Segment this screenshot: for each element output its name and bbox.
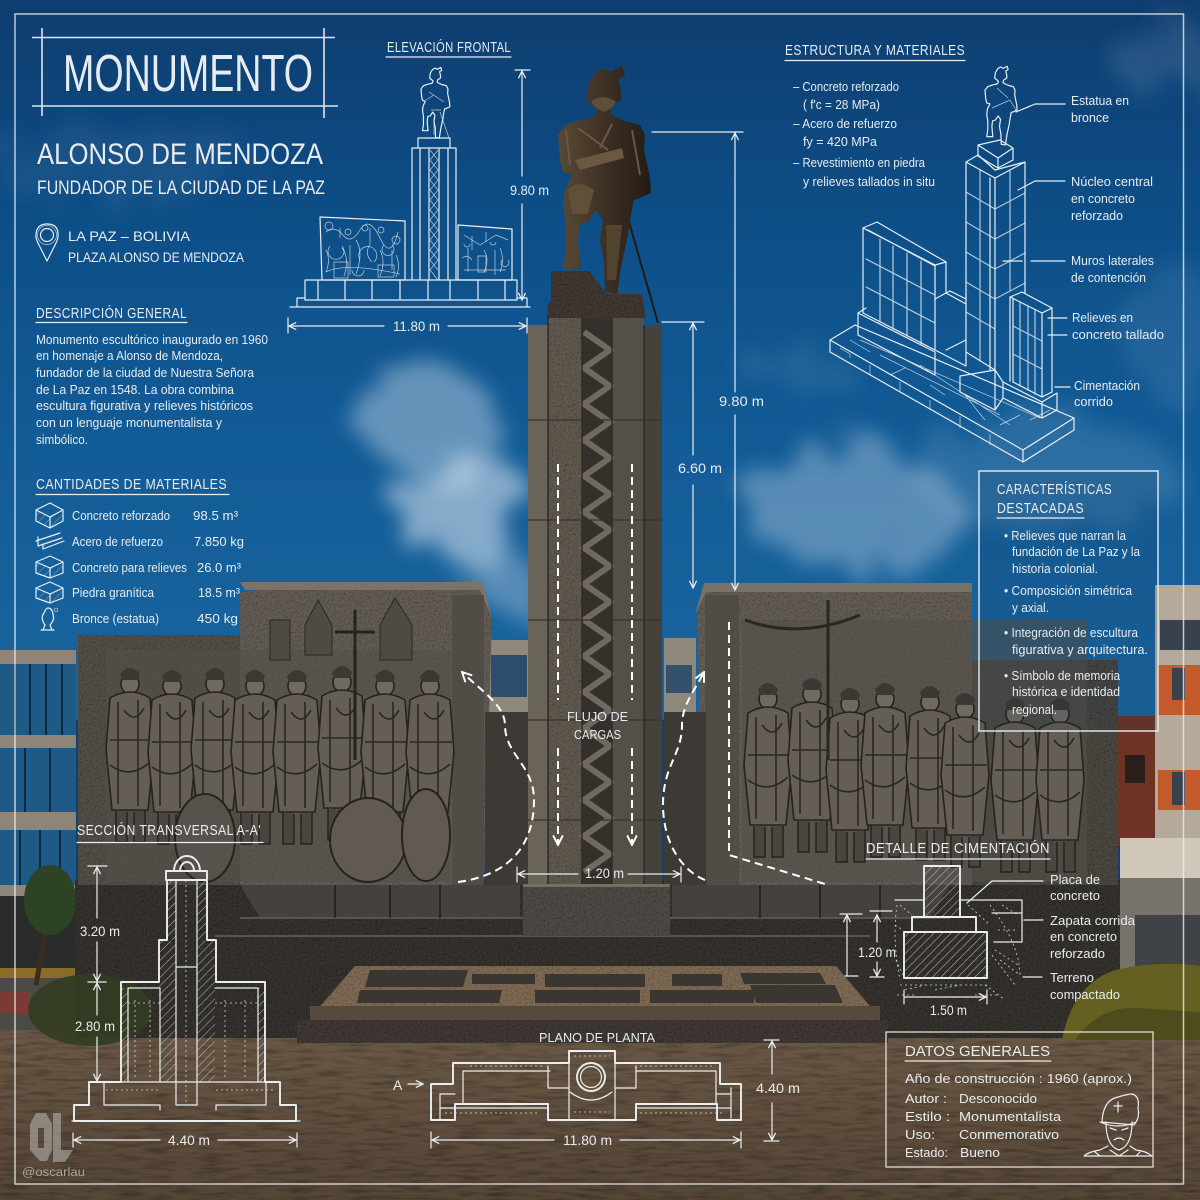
callout: cimentación: corrido	[1074, 395, 1113, 409]
text block: features: histórica e identidad	[1012, 685, 1120, 699]
text block: datos: Año de construcción : 1960 (aprox.)	[905, 1071, 1132, 1086]
panel: elevación frontal	[288, 39, 549, 334]
dimension: 3.20 m: 3.20 m	[80, 923, 120, 939]
materials table	[36, 503, 244, 630]
dimension: 11.80 m plan: 11.80 m	[563, 1132, 612, 1148]
callout: relieves	[1048, 311, 1164, 342]
text block: datos: Estilo :	[905, 1109, 950, 1124]
material row 4: 18.5 m³	[198, 586, 240, 600]
arrow: load flow right	[663, 672, 705, 880]
material row 5: 450 kg	[197, 612, 238, 626]
dimension: 4.40 m plan: 4.40 m	[756, 1080, 800, 1096]
text block: descripción: de La Paz en 1548. La obra combina	[36, 383, 234, 397]
background buildings right	[1118, 585, 1200, 1040]
callout: estatua en bronce: bronce	[1071, 111, 1109, 125]
materials list: – Revestimiento en piedra	[793, 156, 925, 170]
callout: muros laterales: de contención	[1071, 271, 1146, 285]
callout: estatua en bronce	[1016, 94, 1129, 125]
material row 2	[72, 535, 244, 549]
text block: features: regional.	[1012, 703, 1057, 717]
heading: plano de planta: PLANO DE PLANTA	[539, 1031, 656, 1045]
panel: detalle de cimentación	[840, 840, 1135, 1018]
text block: features: • Símbolo de memoria	[1004, 669, 1120, 683]
statue	[547, 66, 658, 323]
dimension: 2.80 m	[75, 983, 115, 1081]
material row 1	[72, 509, 238, 523]
materials list: – Acero de refuerzo	[793, 117, 897, 131]
material row 3: 26.0 m³	[197, 561, 241, 575]
panel: estructura y materiales	[785, 43, 1164, 462]
bushes	[28, 964, 1200, 1046]
text block: datos: Monumentalista	[959, 1109, 1062, 1124]
dimension: 11.80 m plan	[431, 1132, 741, 1148]
watermark: @oscarlau	[22, 1167, 85, 1179]
sky background	[0, 0, 1200, 720]
callout: núcleo central	[1018, 175, 1153, 223]
text block: descripción: fundador de la ciudad de Nuestra Señora	[36, 366, 254, 380]
text block: datos: Conmemorativo	[959, 1127, 1059, 1142]
text block: descripción: Monumento escultórico inaugurado en 1960	[36, 333, 268, 347]
dimension: 1.50 m: 1.50 m	[930, 1002, 967, 1018]
icon: steel bars	[36, 533, 64, 549]
dimension: 2.80 m: 2.80 m	[75, 1018, 115, 1034]
dimension: 9.80 m vertical	[510, 70, 549, 300]
left relief wall	[78, 582, 492, 885]
callout: relieves: Relieves en	[1072, 311, 1133, 325]
icon: location pin	[36, 224, 58, 261]
isometric drawing	[830, 66, 1074, 462]
material row 5: Bronce (estatua)	[72, 612, 159, 626]
callout: placa: Placa de	[1050, 873, 1100, 887]
dimension: 4.40 m: 4.40 m	[168, 1132, 210, 1148]
callout: zapata	[1024, 914, 1135, 961]
section marker A	[393, 1077, 423, 1093]
text block: features	[1004, 529, 1148, 717]
subtitle: ALONSO DE MENDOZA	[37, 138, 323, 171]
callout: zapata: reforzado	[1050, 947, 1105, 961]
dimension: 1.20 m column width: 1.20 m	[585, 865, 624, 881]
watermark	[22, 1113, 85, 1179]
heading: características	[997, 481, 1112, 518]
text block: features: • Integración de escultura	[1004, 626, 1138, 640]
heading: características: CARACTERÍSTICAS	[997, 481, 1112, 498]
callout: terreno: compactado	[1050, 988, 1120, 1002]
icon: conquistador bust	[1084, 1094, 1152, 1156]
heading: características: DESTACADAS	[997, 501, 1084, 517]
materials list: y relieves tallados in situ	[803, 175, 935, 189]
callout: núcleo central: reforzado	[1071, 209, 1123, 223]
materials list	[793, 80, 935, 189]
text block: descripción	[36, 333, 268, 447]
heading: datos generales: DATOS GENERALES	[905, 1043, 1050, 1060]
text block: features: • Relieves que narran la	[1004, 529, 1126, 543]
dimension: 11.80 m horizontal: 11.80 m	[393, 318, 440, 334]
text block: features: figurativa y arquitectura.	[1012, 643, 1148, 657]
material row 3: Concreto para relieves	[72, 561, 187, 575]
text block: datos: Desconocido	[959, 1091, 1037, 1106]
callout: cimentación: Cimentación	[1074, 379, 1140, 393]
diagram: flujo de cargas	[458, 464, 825, 884]
icon: concrete cube	[36, 503, 63, 528]
text block: datos: Uso:	[905, 1127, 935, 1142]
material row 2: Acero de refuerzo	[72, 535, 163, 549]
callout: zapata: en concreto	[1050, 930, 1117, 944]
material row 1: Concreto reforzado	[72, 509, 170, 523]
background buildings centre	[489, 638, 696, 712]
right relief wall	[695, 583, 1118, 885]
callout: placa	[967, 873, 1100, 903]
tree	[24, 865, 76, 985]
title: MONUMENTO: MONUMENTO	[63, 45, 313, 103]
elevation drawing	[290, 67, 530, 307]
heading: elevación frontal	[386, 39, 511, 57]
text block: descripción: escultura figurativa y relieves históricos	[36, 399, 253, 413]
dimension: 6.60 m column: 6.60 m	[678, 460, 722, 476]
section drawing	[72, 856, 300, 1121]
text block: datos: Bueno	[960, 1145, 1000, 1160]
panel: sección transversal	[72, 822, 300, 1148]
material row 2: 7.850 kg	[194, 535, 244, 549]
central column	[523, 314, 670, 936]
material row 4: Piedra granítica	[72, 586, 154, 600]
location text	[68, 228, 245, 265]
heading: descripción general: DESCRIPCIÓN GENERAL	[36, 305, 187, 322]
dimension: 1.20 m column width	[517, 865, 681, 882]
callout: terreno: Terreno	[1050, 971, 1094, 985]
text block: features: y axial.	[1012, 601, 1049, 615]
dimension: 1.50 m	[904, 990, 987, 1018]
subtitle: FUNDADOR DE LA CIUDAD DE LA PAZ	[37, 178, 325, 199]
callout: muros laterales	[1003, 254, 1154, 285]
text block: datos: Estado:	[905, 1145, 948, 1160]
heading: estructura y materiales: ESTRUCTURA Y MATERIALES	[785, 43, 965, 59]
callout: estatua en bronce: Estatua en	[1071, 94, 1129, 108]
icon: stone block	[36, 582, 63, 603]
walls behind column	[485, 712, 706, 885]
icon: relief concrete cube	[36, 556, 63, 578]
heading: elevación frontal: ELEVACIÓN FRONTAL	[387, 39, 511, 56]
text block: descripción: en homenaje a Alonso de Mendoza,	[36, 349, 223, 363]
callout: núcleo central: en concreto	[1071, 192, 1135, 206]
monument photo	[75, 66, 1120, 1043]
dimension: 4.40 m plan	[756, 1040, 800, 1141]
background buildings left	[0, 650, 76, 1038]
callout: placa: concreto	[1050, 889, 1100, 903]
plan drawing	[431, 1051, 741, 1120]
materials list: – Concreto reforzado	[793, 80, 899, 94]
text block: features: fundación de La Paz y la	[1012, 545, 1140, 559]
text block: features: • Composición simétrica	[1004, 584, 1132, 598]
ground	[0, 1030, 1200, 1200]
panel: datos generales	[886, 1032, 1153, 1167]
monument base	[75, 880, 1120, 1038]
callout: terreno	[1023, 971, 1120, 1002]
material row 4	[72, 586, 240, 600]
plaza plaque platform	[297, 966, 888, 1043]
panel: plano de planta	[393, 1031, 800, 1148]
dimension: 4.40 m	[73, 1132, 297, 1148]
dimension: 9.80 m vertical: 9.80 m	[510, 182, 549, 198]
subtitle	[37, 138, 325, 199]
arrow: load flow left	[458, 672, 534, 882]
section marker A: A	[393, 1077, 403, 1093]
callout: relieves: concreto tallado	[1072, 328, 1164, 342]
text block: features: historia colonial.	[1012, 562, 1098, 576]
callout: cimentación	[1055, 379, 1140, 409]
dimension: 11.80 m horizontal	[288, 318, 527, 334]
callout: zapata: Zapata corrida	[1050, 914, 1135, 928]
heading: sección: SECCIÓN TRANSVERSAL A-A'	[77, 822, 261, 839]
heading: cantidades de materiales: CANTIDADES DE MATERIALES	[36, 477, 227, 493]
label: flujo de cargas: CARGAS	[574, 728, 621, 742]
text block: descripción: simbólico.	[36, 433, 88, 447]
callout: núcleo central: Núcleo central	[1071, 175, 1153, 189]
clouds	[0, 20, 1200, 615]
text block: datos: Autor :	[905, 1091, 947, 1106]
callout: muros laterales: Muros laterales	[1071, 254, 1154, 268]
foundation drawing	[895, 866, 1022, 1000]
dimension: 9.80 m total: 9.80 m	[719, 393, 764, 409]
location text: LA PAZ – BOLIVIA	[68, 228, 191, 244]
material row 1: 98.5 m³	[193, 509, 238, 523]
label: flujo de cargas	[567, 710, 628, 742]
material row 5	[72, 612, 238, 626]
title: MONUMENTO	[32, 28, 338, 118]
location text: PLAZA ALONSO DE MENDOZA	[68, 249, 245, 265]
text block: descripción: con un lenguaje monumentalista y	[36, 416, 223, 430]
label: flujo de cargas: FLUJO DE	[567, 710, 628, 724]
dimension: 1.20 m foundation: 1.20 m	[858, 944, 896, 960]
panel: características destacadas	[979, 471, 1158, 731]
heading: detalle: DETALLE DE CIMENTACIÓN	[866, 840, 1050, 857]
materials list: fy = 420 MPa	[803, 135, 877, 149]
icon: bronze bust	[41, 608, 58, 630]
arrow: load flow to foundation	[729, 622, 825, 884]
materials list: ( f'c = 28 MPa)	[803, 98, 880, 112]
dimension: 3.20 m	[80, 866, 120, 982]
text block: datos	[905, 1071, 1132, 1160]
dimension: 1.20 m foundation	[840, 911, 896, 977]
